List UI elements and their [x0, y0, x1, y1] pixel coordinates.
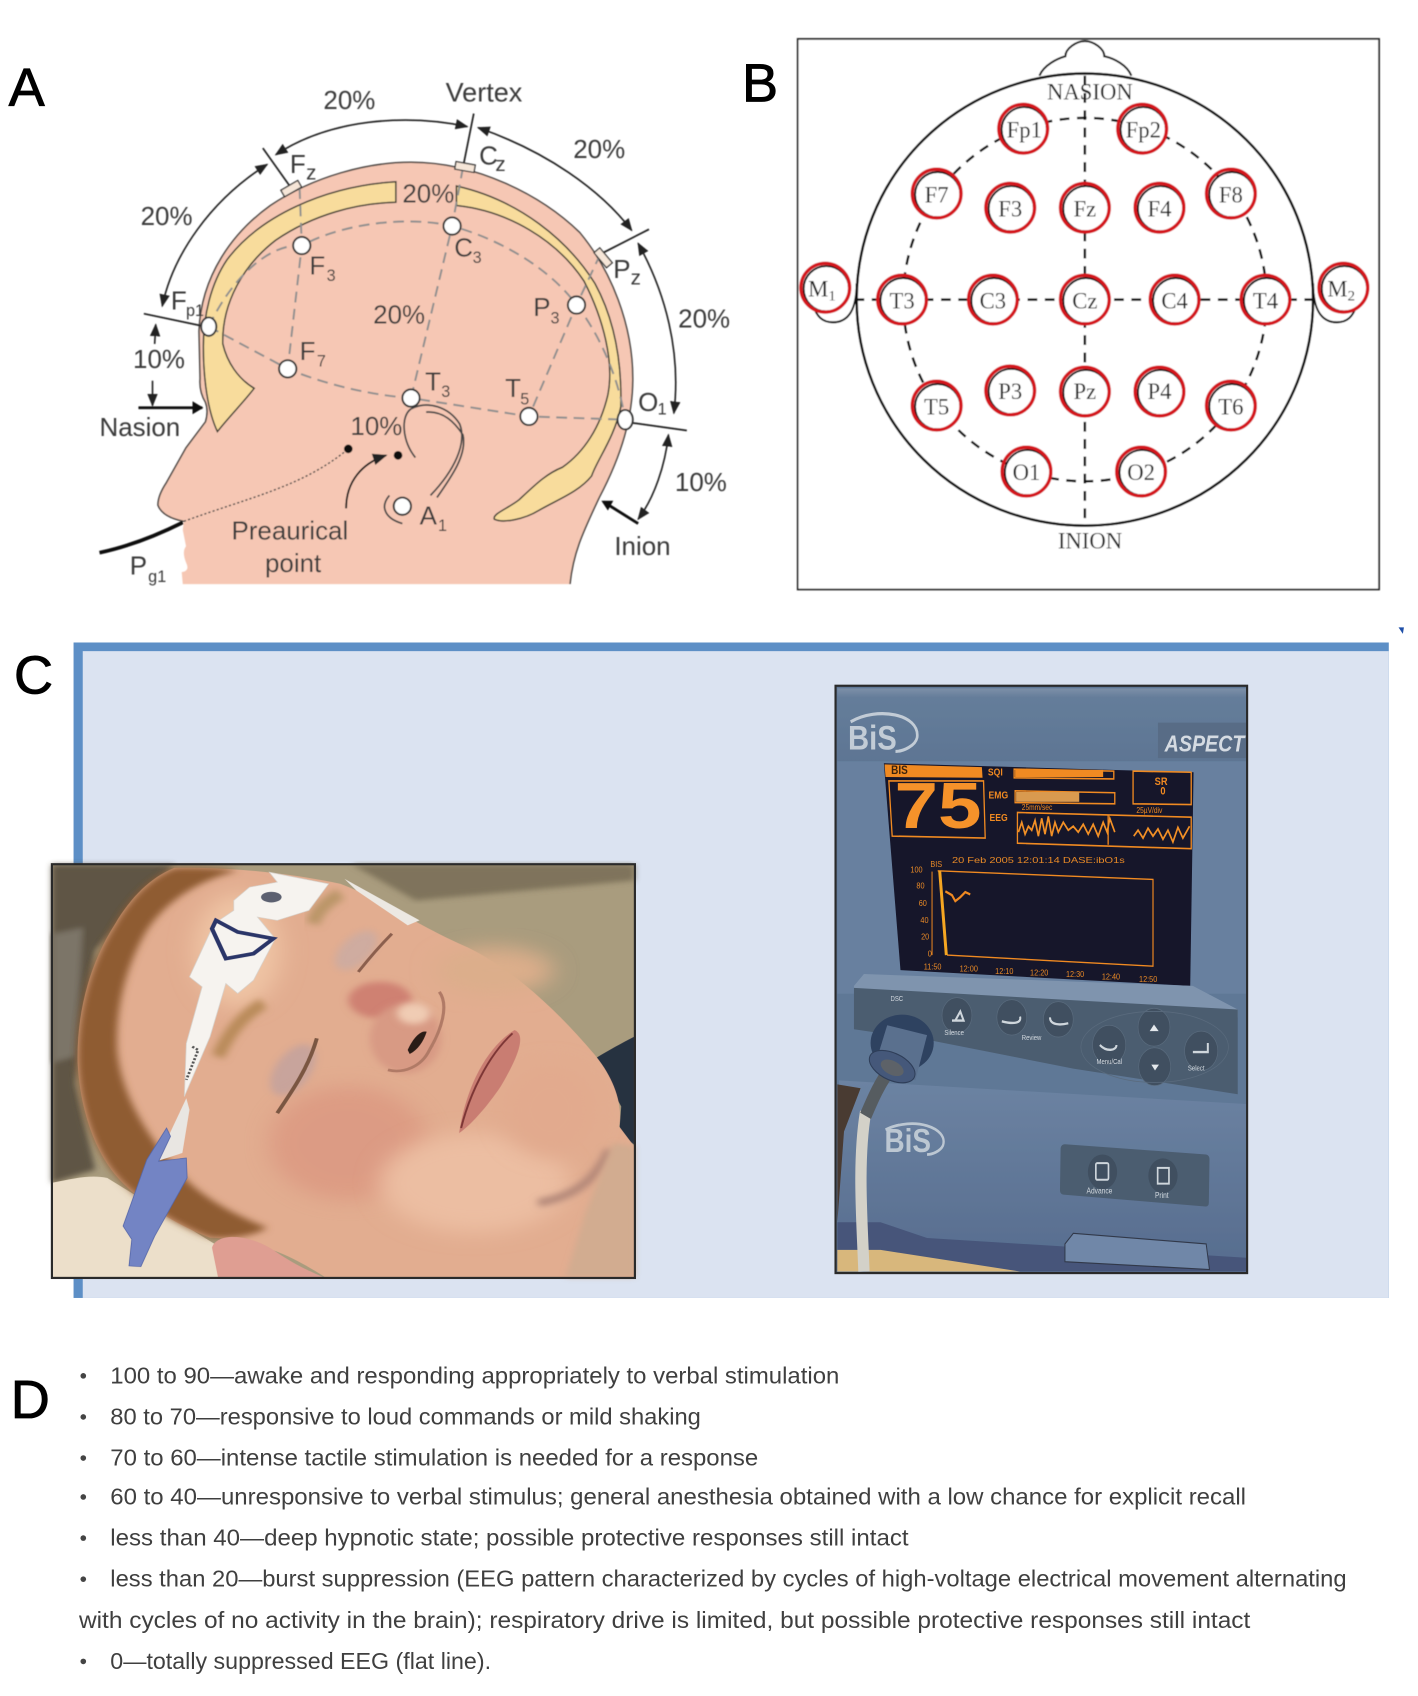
electrode names: Pz: [1074, 379, 1096, 404]
electrode names: M: [808, 276, 828, 301]
panel D: BIS score bullet list: [78, 1362, 1347, 1674]
advance and print panel: Advance: [1087, 1186, 1112, 1196]
measurement ticks: [144, 114, 687, 430]
screen labels: [988, 767, 1168, 824]
electrode names: Fp1: [1007, 117, 1042, 142]
Aspect badge: ASPECT: [1164, 732, 1246, 757]
ears: [813, 283, 1356, 322]
diagram labels: z: [306, 162, 316, 185]
list text: 70 to 60—intense tactile stimulation is needed for a response: [110, 1445, 758, 1471]
red highlight rings: [801, 104, 1368, 496]
advance and print panel: [1060, 1144, 1209, 1207]
pointer arrows: [100, 401, 638, 553]
trend chart labels: 12:30: [1066, 970, 1085, 979]
panel letter C: C: [14, 645, 53, 705]
electrode names: P4: [1148, 379, 1171, 404]
nose: [370, 992, 444, 1073]
diagram labels: 10%: [675, 469, 727, 497]
panel A: 10-20 lateral head diagram: [100, 78, 730, 586]
list text: 0—totally suppressed EEG (flat line).: [110, 1648, 491, 1674]
electrode names: M: [1327, 276, 1348, 301]
trend chart labels: 0: [928, 949, 932, 958]
electrode names: F3: [998, 196, 1022, 221]
advance and print panel: Print: [1155, 1190, 1169, 1200]
trend chart labels: [910, 855, 1158, 984]
control panel: [854, 988, 1238, 1094]
diagram labels: 20%: [323, 87, 375, 115]
diagram labels: C: [454, 234, 473, 262]
diagram labels: 3: [551, 309, 560, 327]
trend chart labels: 80: [916, 881, 925, 891]
diagram labels: P: [613, 256, 631, 284]
button captions: Menu/Cal: [1097, 1058, 1123, 1066]
panel letter B: B: [742, 54, 778, 114]
trend chart labels: 12:50: [1139, 974, 1158, 984]
sensor connector and cable: [861, 1015, 934, 1272]
screen: [884, 763, 1194, 986]
landmark labels: [1047, 80, 1133, 553]
list text: 80 to 70—responsive to loud commands or mild shaking: [110, 1404, 701, 1430]
trend chart labels: 40: [920, 915, 929, 925]
lips: [459, 1030, 520, 1133]
trend chart labels: 12:00: [960, 964, 978, 974]
electrode names: Fp2: [1126, 117, 1161, 142]
trend chart labels: 60: [919, 898, 927, 908]
electrode names: F7: [925, 182, 949, 207]
electrode caps on scalp: [281, 162, 612, 268]
facial shading: [194, 894, 634, 1277]
button captions: Silence: [944, 1030, 964, 1037]
diagram labels: Nasion: [100, 414, 180, 442]
BIS logo lower: BiS: [885, 1123, 931, 1160]
screen labels: SR: [1155, 776, 1168, 788]
diagram labels: O: [638, 389, 658, 417]
panel letter D: D: [11, 1370, 50, 1430]
list text: less than 20—burst suppression (EEG pattern characterized by cycles of high-voltage electrical movement alternating: [110, 1566, 1347, 1592]
electrode names: T4: [1253, 288, 1278, 313]
hair: [77, 868, 267, 1238]
screen labels: 25µV/div: [1136, 806, 1163, 815]
arrow keys: [1150, 1024, 1159, 1071]
BIS logo upper: BiS: [848, 718, 897, 757]
diagram labels: 3: [327, 267, 336, 285]
diagram labels: z: [495, 153, 506, 176]
screen labels: 25mm/sec: [1022, 803, 1053, 812]
diagram labels: C: [479, 142, 498, 170]
diagram labels: P: [533, 294, 551, 322]
dashed electrode lines: [209, 168, 625, 420]
photo background: [52, 865, 634, 1277]
control buttons: [942, 998, 1228, 1086]
logo swoosh: [851, 714, 917, 751]
diagram labels: T: [505, 375, 521, 403]
nose: [1039, 41, 1131, 76]
electrode names: 2: [1348, 289, 1355, 305]
head outline stroke: [158, 162, 633, 584]
diagram labels: 1: [438, 517, 447, 535]
trend chart labels: 12:40: [1102, 972, 1121, 982]
diagram labels: point: [265, 550, 322, 578]
button captions: [891, 995, 1205, 1073]
face and neck: [77, 868, 634, 1277]
trend chart labels: 11:50: [924, 962, 942, 971]
printer slot: [1065, 1233, 1209, 1270]
electrode names: 1: [828, 289, 836, 305]
skull section, occipital: [456, 186, 621, 521]
trend chart labels: BIS: [930, 859, 942, 869]
diagram labels: 20%: [373, 301, 425, 329]
diagram labels: 20%: [141, 203, 193, 231]
bullets: [80, 1373, 86, 1664]
screen labels: EMG: [989, 790, 1008, 802]
sensor connector: [123, 1128, 187, 1267]
electrode names: Fz: [1074, 196, 1096, 221]
diagram labels: T: [425, 368, 441, 396]
diagram labels: A: [420, 503, 438, 531]
BIS index readout: 75: [894, 770, 982, 842]
EEG traces: [1018, 816, 1190, 842]
signal quality bars: [1014, 769, 1191, 849]
panel B: 10-20 top-view map: [798, 39, 1379, 589]
button captions: Select: [1188, 1065, 1205, 1073]
monitor photo frame: [836, 686, 1247, 1273]
ear: [212, 1237, 323, 1277]
diagram labels: 3: [473, 249, 482, 267]
button glyphs: [952, 1011, 1208, 1052]
electrode names: T3: [889, 288, 915, 313]
trend chart labels: 12:20: [1030, 968, 1049, 978]
BIS index readout: [885, 764, 985, 842]
dashed grid: [854, 76, 1313, 527]
list text: less than 40—deep hypnotic state; possible protective responses still intact: [110, 1525, 909, 1551]
trend chart labels: 20 Feb 2005 12:01:14 DASE:ibO1s: [952, 855, 1125, 865]
ear: [385, 405, 464, 524]
diagram labels: p1: [186, 302, 204, 320]
diagram labels: 10%: [350, 413, 402, 441]
panel C background with blue border: [74, 627, 1404, 1298]
diagram labels: 20%: [402, 180, 454, 208]
forehead sensor strip: [157, 872, 420, 1161]
BIS index readout: BIS: [891, 764, 908, 777]
button captions: Review: [1022, 1035, 1042, 1042]
electrode names: C4: [1161, 288, 1188, 313]
diagram labels: Inion: [614, 533, 671, 561]
electrode names: F8: [1219, 182, 1243, 207]
list text: 60 to 40—unresponsive to verbal stimulus; general anesthesia obtained with a low chance for explicit recall: [110, 1484, 1246, 1510]
skull section, frontal: [203, 182, 396, 432]
head outline: [857, 74, 1313, 526]
lower housing: [837, 1080, 1246, 1272]
diagram labels: g1: [148, 568, 166, 586]
button captions: DSC: [891, 995, 903, 1003]
reference dots: [344, 445, 402, 460]
list text: 100 to 90—awake and responding appropriately to verbal stimulation: [110, 1362, 839, 1388]
diagram labels: 20%: [678, 306, 730, 334]
frame: [798, 39, 1379, 589]
panel letter A: A: [9, 58, 45, 118]
landmark labels: INION: [1058, 528, 1122, 553]
diagram labels: F: [171, 287, 187, 315]
electrode names: T6: [1218, 394, 1243, 419]
electrode names: F4: [1148, 196, 1171, 221]
closed eyes: [218, 894, 392, 1113]
diagram labels: F: [300, 338, 315, 366]
diagram labels: F: [290, 151, 306, 179]
electrode names: C3: [980, 288, 1006, 313]
electrode names: P3: [998, 379, 1022, 404]
screen labels: 0: [1160, 786, 1166, 798]
electrode names: [808, 117, 1355, 485]
electrode names: T5: [924, 394, 949, 419]
diagram labels: P: [130, 552, 147, 580]
electrode names: O2: [1127, 460, 1155, 485]
photo: patient wearing BIS forehead sensor: [52, 864, 635, 1278]
upper housing: [837, 688, 1246, 763]
lower logo swoosh: [886, 1124, 944, 1154]
electrodes: [201, 217, 633, 515]
trend chart labels: 12:10: [995, 966, 1014, 976]
diagram labels: Vertex: [446, 78, 523, 108]
diagram labels: [100, 78, 730, 586]
Aspect badge: [1158, 723, 1246, 758]
percentage arc arrows: [153, 120, 676, 519]
landmark labels: NASION: [1047, 80, 1133, 105]
trend chart: [932, 871, 1153, 966]
diagram labels: F: [309, 253, 325, 281]
head silhouette: [158, 162, 633, 584]
electrode names: O1: [1013, 460, 1040, 485]
screen labels: EEG: [990, 812, 1008, 824]
electrode rings: [804, 107, 1367, 495]
trend chart labels: 20: [921, 932, 930, 942]
diagram labels: 7: [317, 353, 326, 371]
diagram labels: Preaurical: [231, 518, 348, 546]
trend chart labels: 100: [910, 865, 923, 875]
list text: [78, 1362, 1347, 1674]
diagram labels: 5: [520, 391, 529, 409]
diagram labels: 10%: [133, 346, 185, 374]
diagram labels: z: [631, 266, 641, 289]
diagram labels: 1: [658, 400, 667, 418]
photo: BIS monitor: [836, 686, 1247, 1273]
screen lower bezel: [854, 974, 1238, 1017]
photo frame: [52, 864, 635, 1278]
electrode names: Cz: [1072, 288, 1097, 313]
screen labels: SQI: [988, 767, 1003, 779]
diagram labels: 20%: [573, 136, 625, 164]
list text: with cycles of no activity in the brain); respiratory drive is limited, but possible protective responses still intact: [78, 1607, 1251, 1633]
diagram labels: 3: [441, 383, 450, 401]
